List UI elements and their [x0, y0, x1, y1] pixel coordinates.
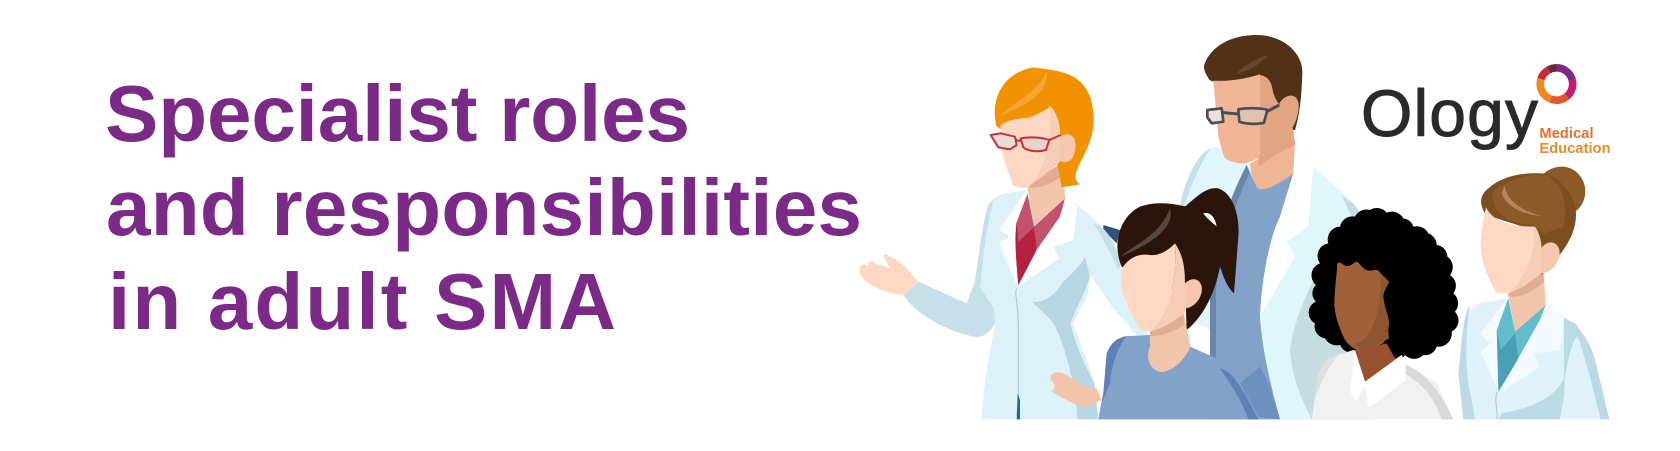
hair: [1117, 203, 1203, 297]
title: [105, 69, 862, 346]
logo subtitle: [1540, 126, 1610, 157]
neck: [1148, 312, 1191, 372]
lapels: [999, 190, 1027, 285]
hair: [995, 67, 1094, 187]
coat shadow: [1498, 318, 1609, 419]
lab coat body: [975, 190, 1148, 419]
sleeve: [1560, 336, 1601, 419]
figure: woman with curly black hair: [1309, 208, 1459, 419]
side of head: [1027, 106, 1060, 187]
bun: [1543, 167, 1585, 212]
neck and face: [1355, 343, 1405, 382]
ear: [1541, 242, 1560, 273]
ear: [1060, 134, 1076, 162]
figure: woman with dark ponytail: [1098, 188, 1260, 419]
logo subtitle: Education: [1540, 141, 1610, 157]
ear: [1185, 279, 1202, 308]
glasses: [991, 133, 1061, 151]
logo wordmark: Ology: [1361, 76, 1538, 150]
figure: woman with hair bun: [1458, 167, 1609, 419]
neck: [1027, 162, 1065, 226]
hand: pointing: [860, 254, 918, 295]
title: and responsibilities: [106, 163, 862, 252]
logo: Ology Medical Education: [1361, 68, 1610, 157]
logo subtitle: Medical: [1540, 126, 1594, 142]
shirt: [1497, 298, 1546, 392]
side of head: [1510, 227, 1542, 293]
face: [1481, 207, 1535, 293]
face: [1121, 243, 1175, 331]
ponytail: [1185, 188, 1239, 330]
curly hair: [1309, 208, 1459, 361]
figure: woman with orange hair and red glasses: [860, 67, 1148, 419]
logo ring: [1540, 68, 1573, 100]
figure: man in lab coat with glasses: [1180, 35, 1373, 419]
shirt: [1015, 193, 1065, 285]
hair: [1481, 173, 1576, 275]
sweater: [1098, 335, 1260, 419]
side of head: [1150, 243, 1185, 331]
blouse collar: [1350, 352, 1406, 408]
sleeve: pointing arm: [903, 277, 995, 337]
title: in adult SMA: [108, 257, 616, 346]
lapels: [1481, 297, 1508, 392]
coat shadow: [1032, 257, 1098, 419]
hand on hip: [1050, 372, 1102, 407]
glasses: man: [1207, 105, 1279, 124]
neck: [1508, 268, 1546, 332]
blouse: [1312, 350, 1453, 419]
title: Specialist roles: [105, 69, 690, 158]
lab coat: [1458, 298, 1609, 419]
face: [1001, 106, 1051, 188]
